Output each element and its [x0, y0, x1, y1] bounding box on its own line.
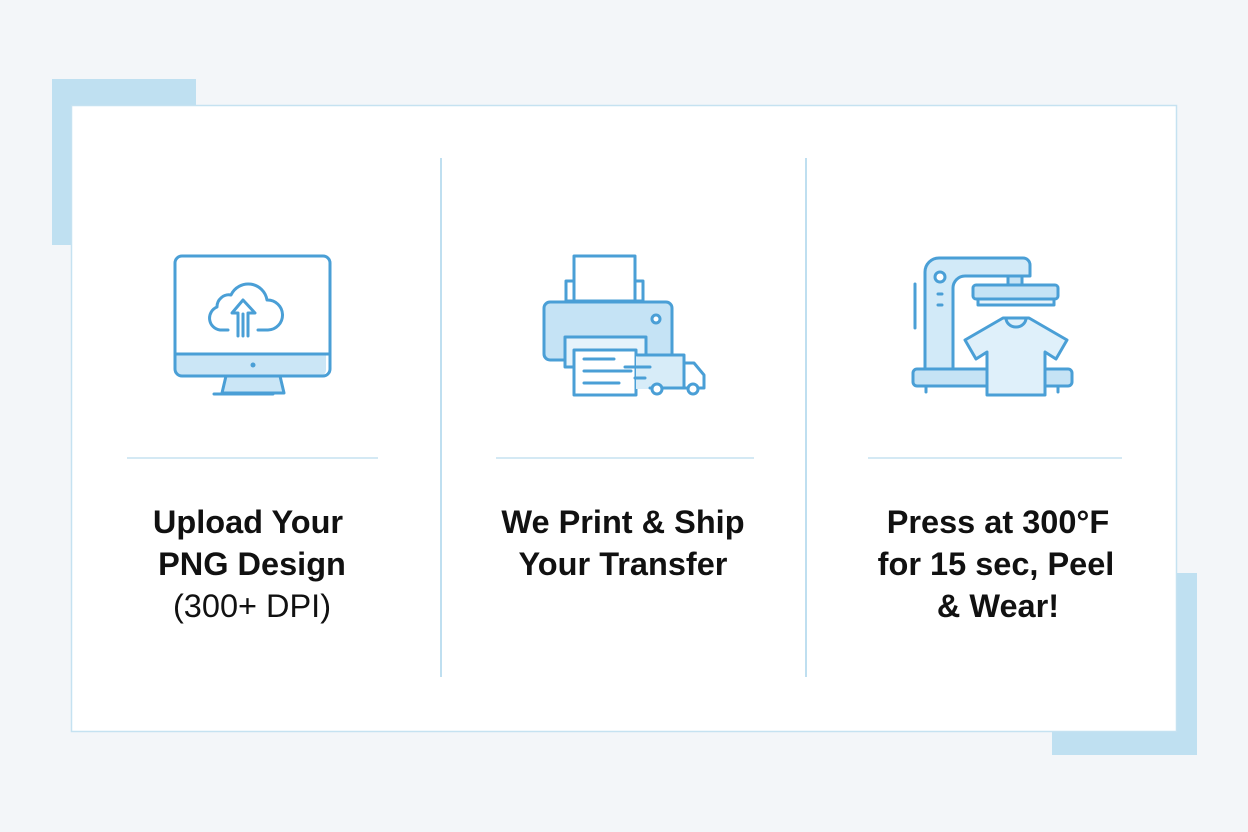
decorative accent bottom-right: [1052, 573, 1197, 755]
text: step 3: Press at 300°F: [887, 504, 1109, 540]
text: step 1: PNG Design: [158, 546, 346, 582]
text: step 1: (300+ DPI): [173, 588, 331, 624]
text: step 1: [153, 504, 346, 624]
text: step 2: [501, 504, 745, 582]
main card: [72, 106, 1176, 732]
text: step 3: [878, 504, 1114, 624]
decorative accent top-left: [52, 79, 196, 245]
icon: heat press with t-shirt: [913, 258, 1072, 395]
text: step 3: & Wear!: [937, 588, 1059, 624]
icon: monitor with cloud upload: [175, 256, 330, 394]
text: step 2: We Print & Ship: [501, 504, 745, 540]
text: step 1: Upload Your: [153, 504, 343, 540]
icon: printer with truck: [544, 256, 704, 395]
text: step 2: Your Transfer: [519, 546, 728, 582]
text: step 3: for 15 sec, Peel: [878, 546, 1114, 582]
